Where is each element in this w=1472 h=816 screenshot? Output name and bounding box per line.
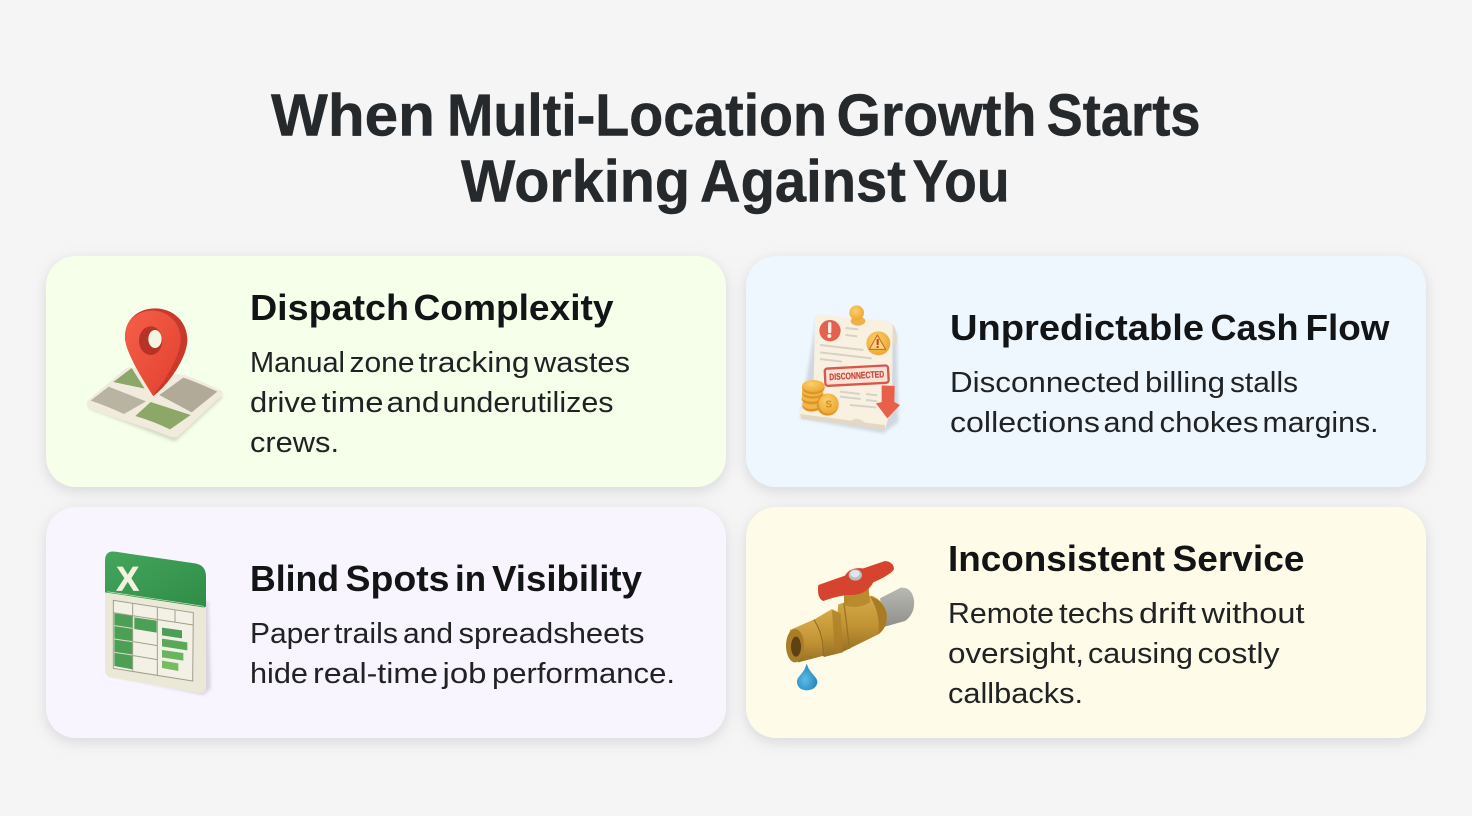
- icon: disconnected invoice with coins: S: [825, 399, 832, 410]
- text: cash flow description: chokes: [1160, 407, 1258, 439]
- card background: dispatch complexity: [46, 256, 726, 487]
- text: dispatch complexity description: [250, 347, 630, 459]
- text: cash flow description: [950, 367, 1378, 439]
- text: blind spots description: performance.: [492, 658, 675, 690]
- text: blind spots description: spreadsheets: [458, 618, 644, 650]
- text: dispatch complexity description: crews.: [250, 427, 339, 459]
- icon: map with location pin: [86, 308, 223, 442]
- icon: disconnected invoice with coins: [799, 305, 900, 433]
- text: dispatch complexity description: underutilizes: [442, 387, 614, 419]
- heading: blind spots in visibility: in: [455, 558, 486, 599]
- text: blind spots description: Paper: [250, 618, 331, 650]
- text: dispatch complexity description: wastes: [533, 347, 630, 379]
- text: inconsistent service description: drift: [1139, 598, 1196, 630]
- panel: inconsistent service: [746, 507, 1426, 738]
- card background: inconsistent service: [746, 507, 1426, 738]
- text: cash flow description: billing: [1145, 367, 1225, 399]
- text: inconsistent service description: oversight,: [948, 638, 1084, 670]
- heading: inconsistent service: Service: [1172, 538, 1304, 579]
- title: Working: [461, 148, 690, 214]
- text: cash flow description: stalls: [1230, 367, 1298, 399]
- heading: blind spots in visibility: Visibility: [492, 558, 642, 599]
- icon: spreadsheet: X: [116, 560, 139, 598]
- title: Multi-Location: [447, 82, 827, 148]
- heading: blind spots in visibility: Blind: [250, 558, 339, 599]
- text: blind spots description: job: [441, 658, 486, 690]
- icon: spreadsheet: [105, 552, 211, 695]
- heading: dispatch complexity: Dispatch: [250, 287, 409, 328]
- heading: blind spots in visibility: Spots: [346, 558, 450, 599]
- text: inconsistent service description: callbacks.: [948, 678, 1083, 710]
- title: [271, 82, 1200, 214]
- panel: dispatch complexity: [46, 256, 726, 487]
- text: cash flow description: collections: [950, 407, 1100, 439]
- text: inconsistent service description: causing: [1088, 638, 1193, 670]
- card background: blind spots: [46, 507, 726, 738]
- heading: dispatch complexity: Complexity: [414, 287, 614, 328]
- heading: inconsistent service: Inconsistent: [948, 538, 1165, 579]
- text: inconsistent service description: without: [1200, 598, 1305, 630]
- text: blind spots description: [250, 618, 675, 690]
- text: blind spots description: hide: [250, 658, 308, 690]
- text: cash flow description: and: [1104, 407, 1154, 439]
- text: inconsistent service description: costly: [1198, 638, 1280, 670]
- text: blind spots description: and: [403, 618, 453, 650]
- text: blind spots description: trails: [334, 618, 398, 650]
- title: Growth: [836, 82, 1036, 148]
- heading: unpredictable cash flow: Unpredictable: [950, 307, 1204, 348]
- heading: unpredictable cash flow: Cash: [1210, 307, 1298, 348]
- card background: cash flow: [746, 256, 1426, 487]
- text: cash flow description: margins.: [1262, 407, 1378, 439]
- title: Against: [700, 148, 906, 214]
- panel: blind spots in visibility: [46, 507, 726, 738]
- heading: unpredictable cash flow: Flow: [1306, 307, 1391, 348]
- text: cash flow description: Disconnected: [950, 367, 1140, 399]
- title: Starts: [1046, 82, 1200, 148]
- title: You: [912, 148, 1010, 214]
- text: inconsistent service description: [948, 598, 1305, 710]
- text: inconsistent service description: techs: [1059, 598, 1134, 630]
- text: inconsistent service description: Remote: [948, 598, 1054, 630]
- icon: leaking brass valve: [786, 561, 914, 690]
- text: dispatch complexity description: zone: [350, 347, 414, 379]
- panel: unpredictable cash flow: [746, 256, 1426, 487]
- text: blind spots description: real-time: [313, 658, 438, 690]
- text: dispatch complexity description: time: [322, 387, 384, 419]
- text: dispatch complexity description: tracking: [418, 347, 530, 379]
- icon: disconnected invoice with coins: DISCONNECTED: [829, 369, 885, 382]
- title: When: [271, 82, 435, 148]
- text: dispatch complexity description: and: [386, 387, 440, 419]
- text: dispatch complexity description: drive: [250, 387, 317, 419]
- text: dispatch complexity description: Manual: [250, 347, 345, 379]
